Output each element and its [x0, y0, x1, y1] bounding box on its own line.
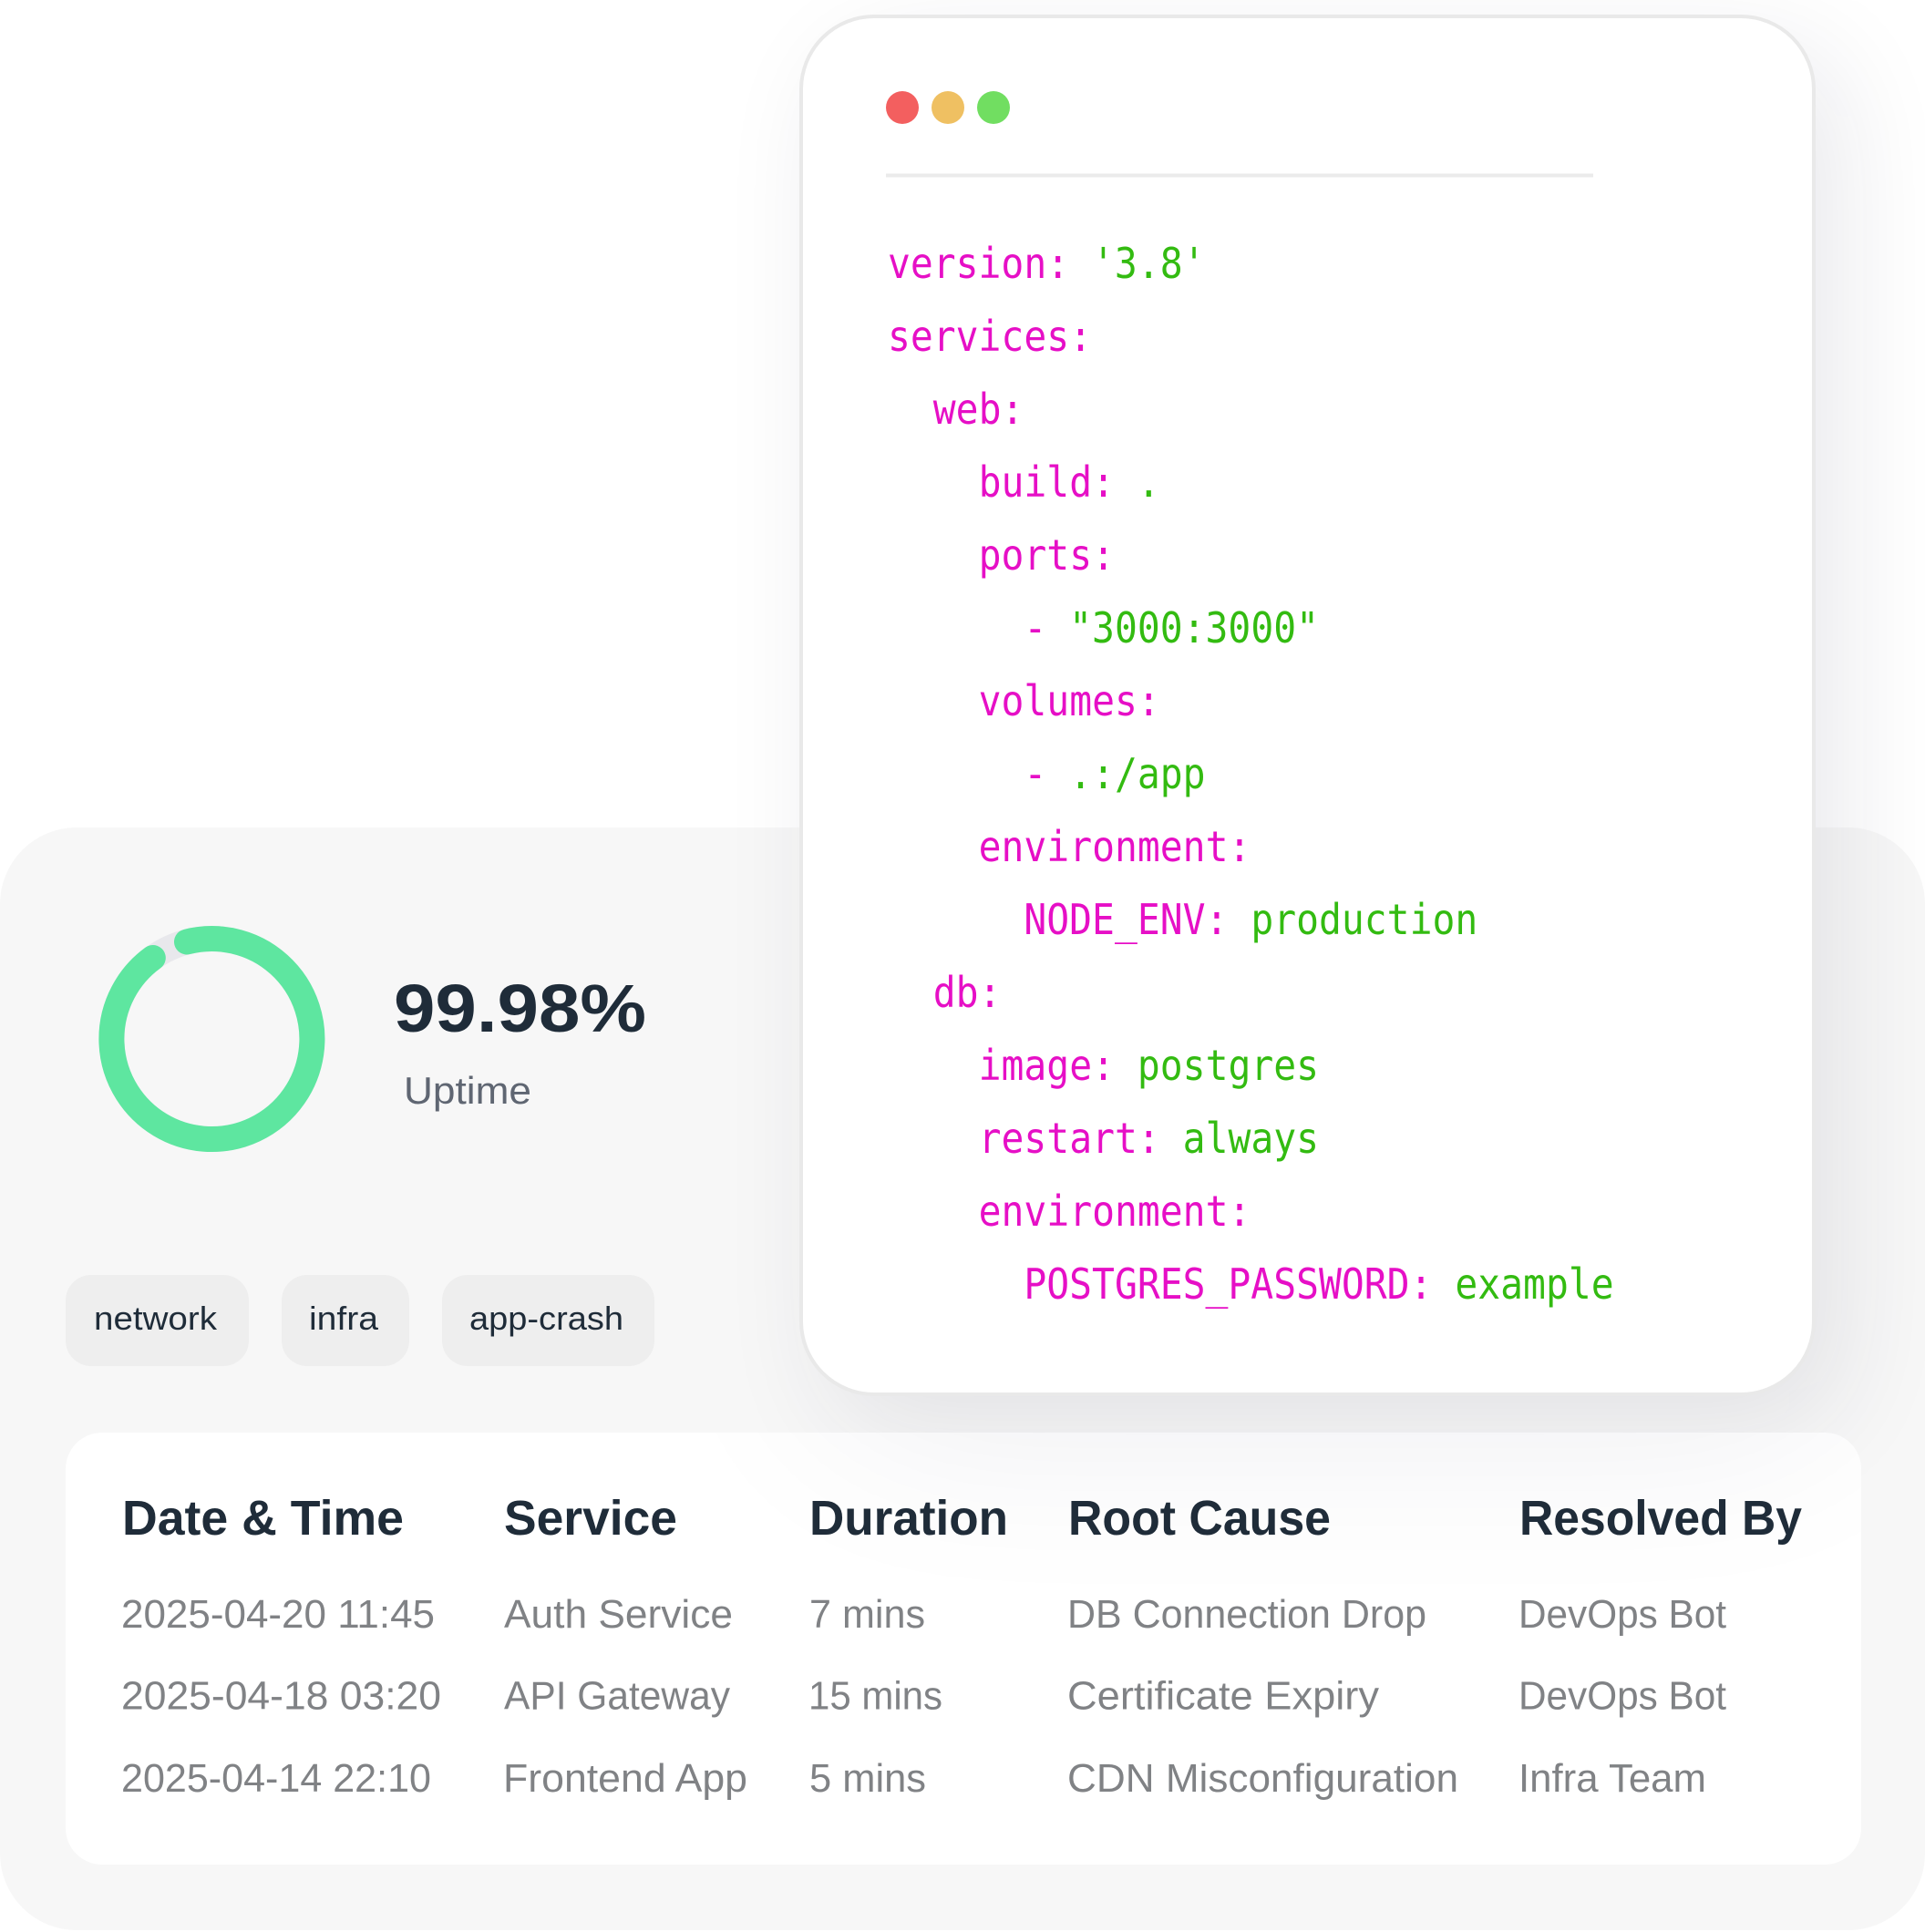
YAML code block — [888, 240, 1614, 1310]
panel: incident table — [123, 1433, 1858, 1800]
YAML code block: ports: — [979, 531, 1115, 581]
YAML code block: restart: always — [979, 1115, 1319, 1164]
window control dots — [886, 91, 1010, 124]
YAML code block: NODE_ENV: production — [1024, 896, 1477, 945]
YAML code block: image: postgres — [979, 1042, 1319, 1091]
table header row: Duration — [809, 1491, 1008, 1546]
tag: infra: infra — [309, 1300, 379, 1337]
table header row — [122, 1491, 1802, 1546]
panel: code window — [801, 16, 1814, 1394]
table row: 2025-04-14: Frontend App — [503, 1756, 747, 1801]
donut chart: uptime ring — [111, 939, 312, 1139]
YAML code block: services: — [888, 313, 1092, 362]
stat label: Uptime: Uptime — [404, 1069, 531, 1112]
tag: network — [66, 1275, 249, 1366]
YAML code block: web: — [933, 385, 1024, 435]
YAML code block: volumes: — [979, 677, 1160, 726]
YAML code block: build: . — [979, 458, 1160, 508]
table row: 2025-04-20: 7 mins — [809, 1592, 925, 1637]
table row: 2025-04-14: CDN Misconfiguration — [1067, 1756, 1458, 1801]
table header row: Service — [504, 1491, 677, 1546]
YAML code block: - .:/app — [1024, 750, 1206, 799]
table row: 2025-04-18: 15 mins — [808, 1673, 942, 1719]
panel: grey dashboard background — [0, 827, 1925, 1930]
tag: network: network — [94, 1300, 218, 1337]
table header row: Resolved By — [1519, 1491, 1802, 1546]
table header row: Root Cause — [1068, 1491, 1331, 1546]
tag: app-crash: app-crash — [469, 1300, 623, 1337]
table row: 2025-04-14 — [121, 1756, 1706, 1801]
tag: infra — [282, 1275, 409, 1366]
YAML code block: environment: — [979, 1187, 1251, 1237]
table row: 2025-04-20: DevOps Bot — [1518, 1592, 1726, 1637]
table row: 2025-04-18 — [121, 1673, 1726, 1719]
YAML code block: db: — [933, 969, 1001, 1018]
YAML code block: environment: — [979, 823, 1251, 872]
table row: 2025-04-18: DevOps Bot — [1518, 1673, 1726, 1719]
table row: 2025-04-14: 5 mins — [809, 1756, 926, 1801]
table row: 2025-04-14: Infra Team — [1518, 1756, 1706, 1801]
table row: 2025-04-18: Certificate Expiry — [1067, 1673, 1379, 1719]
table header row: Date & Time — [122, 1491, 404, 1546]
YAML code block: POSTGRES_PASSWORD: example — [1024, 1260, 1614, 1310]
tag: app-crash — [442, 1275, 654, 1366]
YAML code block: - "3000:3000" — [1024, 604, 1319, 653]
table row: 2025-04-14: 2025-04-14 22:10 — [121, 1756, 431, 1801]
table row: 2025-04-20 — [121, 1592, 1726, 1637]
table row: 2025-04-20: DB Connection Drop — [1067, 1592, 1426, 1637]
stat: uptime value: 99.98% — [394, 971, 646, 1046]
table row: 2025-04-20: 2025-04-20 11:45 — [121, 1592, 435, 1637]
YAML code block: version: '3.8' — [888, 240, 1205, 289]
table row: 2025-04-18: API Gateway — [504, 1673, 730, 1719]
table row: 2025-04-18: 2025-04-18 03:20 — [121, 1673, 441, 1719]
table row: 2025-04-20: Auth Service — [504, 1592, 733, 1637]
